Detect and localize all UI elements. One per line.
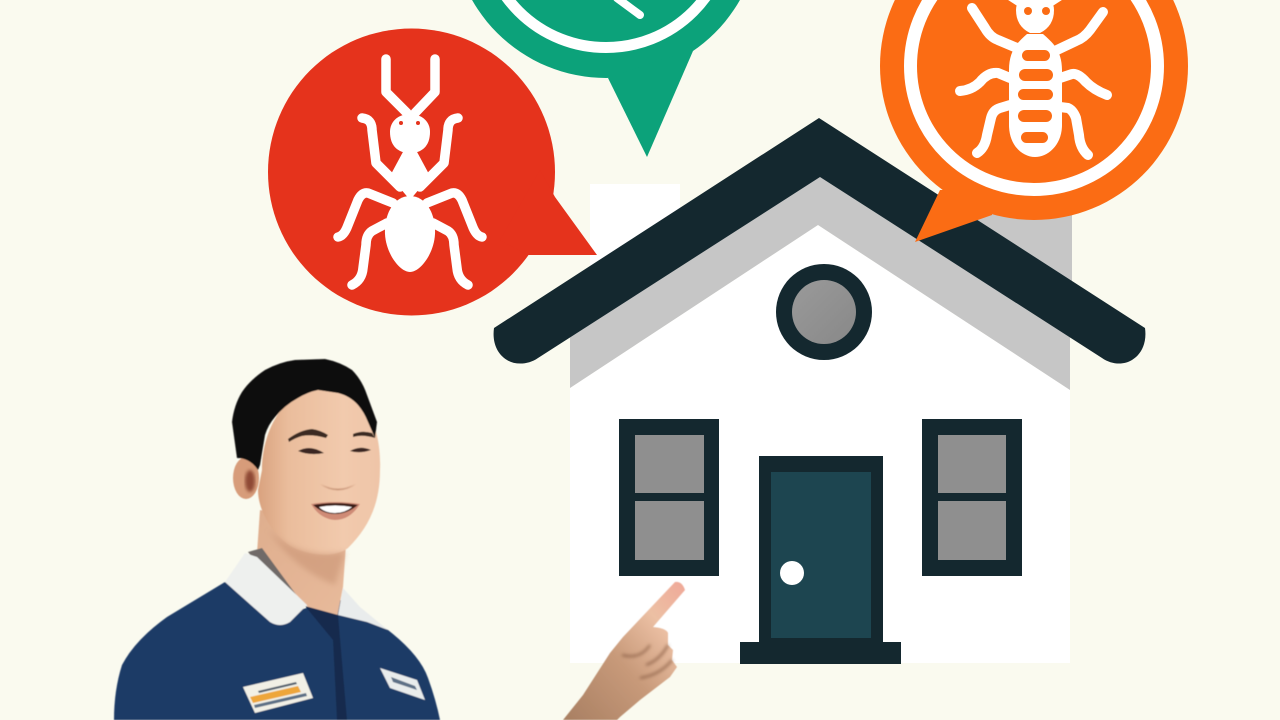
red bubble <box>268 28 597 316</box>
chin shadow <box>268 530 345 585</box>
ear <box>233 457 259 499</box>
left collar <box>225 553 307 625</box>
left chimney <box>590 184 680 294</box>
hair <box>232 359 377 470</box>
roof <box>494 118 1145 364</box>
shirt placket <box>305 606 347 720</box>
orange speech bubble: termite <box>880 0 1188 242</box>
right window <box>922 419 1022 576</box>
house <box>494 118 1145 664</box>
right collar <box>338 588 388 630</box>
red speech bubble: ant <box>268 28 597 316</box>
nose <box>320 484 356 490</box>
ant icon <box>338 59 482 285</box>
orange bubble <box>880 0 1188 242</box>
eyebrows <box>288 429 375 442</box>
mouth <box>311 502 360 520</box>
green bubble <box>452 0 760 157</box>
face <box>258 385 380 555</box>
right chest badge <box>380 668 425 700</box>
collar shadow <box>248 548 300 605</box>
pest control technician <box>114 359 685 720</box>
door <box>740 456 901 664</box>
insect leg fragment <box>617 0 640 15</box>
neck <box>257 510 347 628</box>
left chest badge <box>243 673 313 713</box>
green bubble ring <box>482 0 730 48</box>
eyes <box>298 448 371 454</box>
right chimney <box>960 190 1072 310</box>
orange bubble ring <box>910 0 1158 190</box>
shirt <box>114 582 440 720</box>
finger creases <box>622 645 672 678</box>
house body <box>570 225 1070 663</box>
pointing hand <box>563 582 685 720</box>
roof underside <box>570 170 1070 390</box>
green speech bubble <box>452 0 760 157</box>
round attic window <box>776 264 872 360</box>
termite icon <box>960 0 1107 157</box>
left window <box>619 419 719 576</box>
